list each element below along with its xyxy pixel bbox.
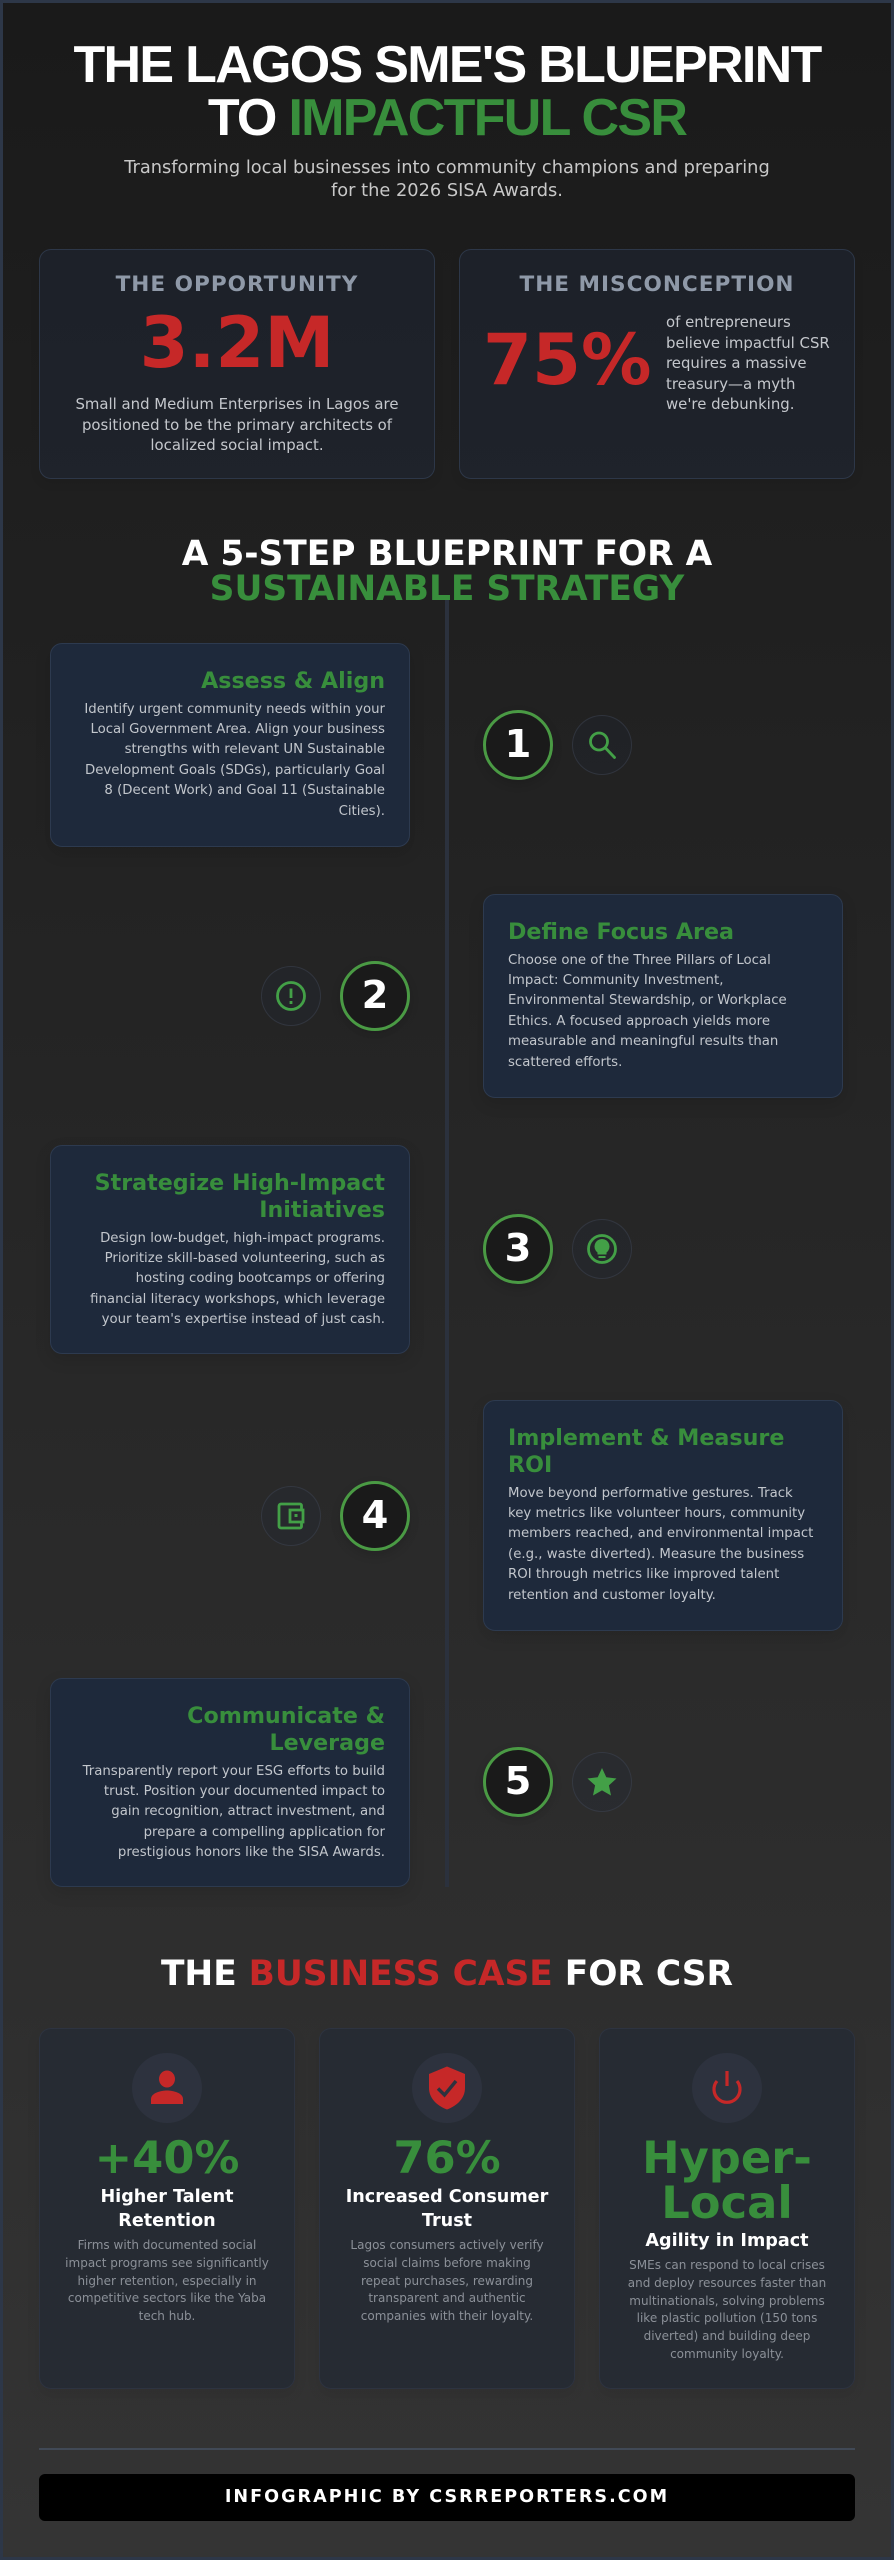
step 5 text: gain recognition, attract investment, and (111, 1804, 385, 1819)
step 5 card (50, 1678, 410, 1887)
icon: magnifying glass (572, 715, 632, 775)
talent label: Higher Talent (100, 2187, 234, 2207)
step 2 text: measurable and meaningful results than (508, 1034, 778, 1049)
stat: 76%: 76% (393, 2131, 501, 2184)
stat: hyper-local: Hyper- (642, 2131, 812, 2184)
step 4 title: ROI (508, 1452, 552, 1478)
step 4 text (508, 1486, 814, 1603)
talent description: impact programs see significantly (65, 2256, 269, 2270)
step 2 card (483, 894, 843, 1098)
title: THE LAGOS SME'S BLUEPRINT (73, 36, 821, 94)
step 4 text: ROI through metrics like improved talent (508, 1567, 779, 1582)
panel: consumer trust (319, 2028, 575, 2389)
stat: hyper-local (642, 2131, 812, 2229)
opportunity description: localized social impact. (150, 436, 324, 454)
icon: power (692, 2053, 762, 2123)
subtitle (124, 157, 770, 201)
agility label: Agility in Impact (645, 2231, 809, 2251)
stat: +40%: +40% (95, 2131, 239, 2184)
step 3 title: Strategize High-Impact (95, 1170, 385, 1196)
step 1 card (50, 643, 410, 847)
step 1 text: strengths with relevant UN Sustainable (125, 742, 385, 757)
agility description: community loyalty. (670, 2347, 784, 2361)
step 1 number (483, 710, 553, 780)
stat: hyper-local: Local (661, 2176, 793, 2229)
trust label (346, 2187, 548, 2230)
talent description: Firms with documented social (78, 2238, 256, 2252)
blueprint heading: A 5-STEP BLUEPRINT FOR A (182, 534, 712, 574)
misconception description (666, 313, 830, 413)
icon: alert circle (261, 966, 321, 1026)
step 1 text: Identify urgent community needs within your (84, 702, 385, 717)
misconception stat: 75% (483, 319, 651, 401)
step 1 number: 1 (505, 722, 531, 767)
misconception description: we're debunking. (666, 395, 794, 413)
footer bar (39, 2474, 855, 2521)
icon: shield check (412, 2053, 482, 2123)
blueprint heading: SUSTAINABLE STRATEGY (210, 569, 684, 609)
opportunity description: Small and Medium Enterprises in Lagos are (75, 395, 399, 413)
step 2 text: Choose one of the Three Pillars of Local (508, 953, 771, 968)
talent description: higher retention, especially in (77, 2274, 257, 2288)
step 5 text: prepare a compelling application for (144, 1825, 385, 1840)
agility description (628, 2258, 826, 2361)
step 5 text: trust. Position your documented impact to (104, 1784, 385, 1799)
trust description: companies with their loyalty. (361, 2309, 533, 2323)
agility description: multinationals, solving problems (629, 2294, 825, 2308)
step 5 title: Leverage (269, 1730, 385, 1756)
step 4 title: Implement & Measure (508, 1425, 784, 1451)
opportunity heading: THE OPPORTUNITY (116, 272, 358, 297)
subtitle: for the 2026 SISA Awards. (331, 180, 563, 201)
step 2 text: Ethics. A focused approach yields more (508, 1014, 770, 1029)
panel: the opportunity (39, 249, 435, 479)
step 3 text: hosting coding bootcamps or offering (136, 1271, 385, 1286)
step 4 text: members reached, and environmental impact (508, 1526, 813, 1541)
step 4 title (508, 1425, 784, 1478)
footer bar: INFOGRAPHIC BY CSRREPORTERS.COM (225, 2487, 669, 2507)
step 4 text: (e.g., waste diverted). Measure the business (508, 1547, 804, 1562)
step 3 text: Design low-budget, high-impact programs. (100, 1231, 385, 1246)
step 3 text: financial literacy workshops, which leverage (90, 1292, 385, 1307)
misconception heading: THE MISCONCEPTION (519, 272, 795, 297)
trust description (350, 2238, 544, 2323)
step 4 number (340, 1481, 410, 1551)
step 4 number: 4 (362, 1493, 388, 1538)
step 1 title: Assess & Align (201, 668, 385, 694)
step 2 title: Define Focus Area (508, 919, 734, 945)
agility description: and deploy resources faster than (628, 2276, 826, 2290)
step 5 title: Communicate & (187, 1703, 385, 1729)
step 5 number (483, 1747, 553, 1817)
talent label: Retention (118, 2210, 216, 2230)
step 4 text: Move beyond performative gestures. Track (508, 1486, 793, 1501)
step 4 text: key metrics like volunteer hours, community (508, 1506, 805, 1521)
step 2 number: 2 (362, 973, 388, 1018)
step 3 title: Initiatives (259, 1197, 385, 1223)
blueprint heading (182, 534, 712, 609)
step 3 card (50, 1145, 410, 1354)
talent label (100, 2187, 234, 2230)
icon: wallet (261, 1486, 321, 1546)
step 2 number (340, 961, 410, 1031)
trust description: Lagos consumers actively verify (350, 2238, 544, 2252)
step 3 text (90, 1231, 385, 1327)
step 1 text: 8 (Decent Work) and Goal 11 (Sustainable (104, 783, 385, 798)
panel: the misconception (459, 249, 855, 479)
step 4 text: retention and customer loyalty. (508, 1588, 716, 1603)
business case heading: THE BUSINESS CASE FOR CSR (161, 1954, 733, 1994)
step 2 text: scattered efforts. (508, 1055, 622, 1070)
step 5 text: Transparently report your ESG efforts to build (83, 1764, 385, 1779)
step 5 number: 5 (505, 1759, 531, 1804)
step 1 text: Development Goals (SDGs), particularly Goal (85, 763, 385, 778)
step 3 number: 3 (505, 1226, 531, 1271)
step 1 text: Cities). (339, 804, 385, 819)
step 3 text: Prioritize skill-based volunteering, such as (105, 1251, 385, 1266)
talent description (65, 2238, 269, 2323)
panel: agility in impact (599, 2028, 855, 2389)
step 2 text: Impact: Community Investment, (508, 973, 723, 988)
talent description: tech hub. (139, 2309, 195, 2323)
agility description: SMEs can respond to local crises (629, 2258, 825, 2272)
step 5 text: prestigious honors like the SISA Awards. (118, 1845, 385, 1860)
misconception description: believe impactful CSR (666, 334, 830, 352)
trust label: Increased Consumer (346, 2187, 548, 2207)
misconception description: requires a massive (666, 354, 807, 372)
trust description: social claims before making (363, 2256, 531, 2270)
icon: star (572, 1752, 632, 1812)
opportunity stat: 3.2M (140, 302, 334, 384)
trust label: Trust (422, 2210, 472, 2230)
misconception description: treasury—a myth (666, 374, 795, 392)
title: TO IMPACTFUL CSR (208, 89, 686, 147)
step 3 number (483, 1214, 553, 1284)
step 3 text: your team's expertise instead of just cash. (102, 1312, 385, 1327)
opportunity description: positioned to be the primary architects of (82, 416, 392, 434)
step 3 title (95, 1170, 385, 1223)
opportunity description (75, 395, 399, 454)
misconception description: of entrepreneurs (666, 313, 791, 331)
talent description: competitive sectors like the Yaba (68, 2291, 266, 2305)
icon: light bulb (572, 1219, 632, 1279)
timeline spine (445, 600, 449, 1887)
icon: person (132, 2053, 202, 2123)
title (73, 36, 822, 147)
step 1 text (84, 702, 385, 819)
step 5 title (187, 1703, 385, 1756)
panel: talent retention (39, 2028, 295, 2389)
step 1 text: Local Government Area. Align your business (90, 722, 385, 737)
step 2 text: Environmental Stewardship, or Workplace (508, 993, 787, 1008)
subtitle: Transforming local businesses into community champions and preparing (124, 157, 770, 178)
step 2 text (508, 953, 787, 1070)
agility description: like plastic pollution (150 tons (637, 2311, 817, 2325)
trust description: repeat purchases, rewarding (361, 2274, 533, 2288)
step 4 card (483, 1400, 843, 1631)
trust description: transparent and authentic (368, 2291, 526, 2305)
agility description: diverted) and building deep (644, 2329, 810, 2343)
step 5 text (82, 1764, 385, 1860)
